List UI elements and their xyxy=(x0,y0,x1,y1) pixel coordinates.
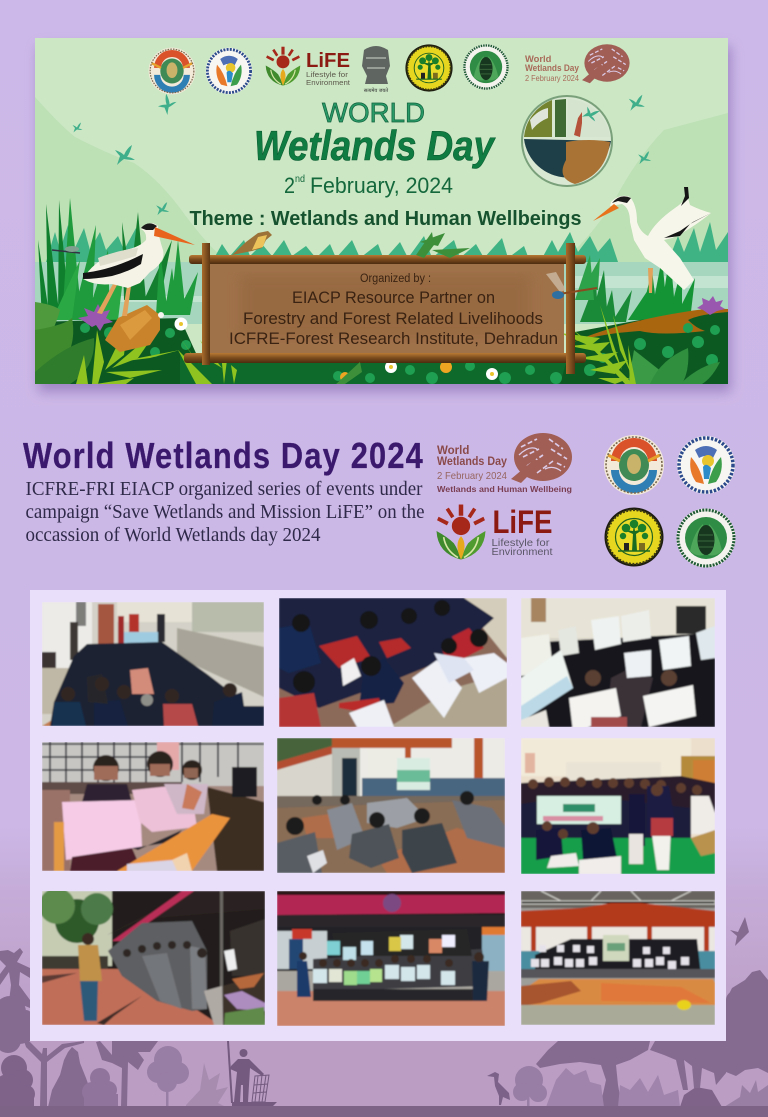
icon: wetlands globe xyxy=(522,96,612,186)
banner: marsh ground xyxy=(35,309,728,384)
logo: MoEFCC round xyxy=(604,435,664,495)
logo: World Wetlands Day 2024: 2 February 2024 xyxy=(437,470,507,482)
logo: LiFE Lifestyle for Environment: Lifestyle for xyxy=(492,537,550,549)
banner shadow xyxy=(38,46,731,392)
theme text: Theme : Wetlands and Human Wellbeings xyxy=(190,207,582,230)
signboard text xyxy=(229,273,558,348)
banner: frog xyxy=(105,305,164,352)
logo: World Wetlands Day: 2 February 2024 xyxy=(525,73,579,83)
banner: small flying birds xyxy=(72,92,651,215)
silhouette: left bush xyxy=(0,1055,35,1107)
photo: group portrait with banner xyxy=(521,738,715,874)
logo: EIACP round xyxy=(677,436,735,494)
icon: flowers xyxy=(78,296,725,382)
logo: LiFE Lifestyle for Environment: Environment xyxy=(492,546,553,558)
banner: back grass xyxy=(46,222,728,262)
logo: World Wetlands Day: Wetlands Day xyxy=(525,62,580,73)
silhouette: lacy bush xyxy=(82,1068,118,1107)
photo: boys addressed under canopy xyxy=(42,891,265,1025)
signboard xyxy=(184,243,586,374)
silhouette: palm tree xyxy=(96,1041,158,1107)
description text: occassion of World Wetlands day 2024 xyxy=(26,524,320,546)
silhouette: left palm xyxy=(0,948,34,1053)
description text: campaign “Save Wetlands and Mission LiFE” on the xyxy=(26,501,425,523)
bottom silhouette landscape xyxy=(0,917,768,1107)
heading: WORLD: WORLD xyxy=(322,97,425,128)
icon: national emblem: सत्यमेव जयते xyxy=(364,87,388,94)
signboard text: ICFRE-Forest Research Institute, Dehradun xyxy=(229,330,558,348)
logo: LiFE xyxy=(266,47,351,87)
signboard text: EIACP Resource Partner on xyxy=(292,289,495,307)
description text: ICFRE-FRI EIACP organized series of events under xyxy=(26,478,423,500)
silhouette: heron xyxy=(487,1072,510,1105)
icon: dragonfly xyxy=(546,272,597,299)
icon: small dragonfly xyxy=(52,246,80,253)
panel: photo gallery xyxy=(30,590,726,1041)
banner: front reeds left xyxy=(38,198,198,320)
silhouette: conifer xyxy=(48,1047,94,1107)
silhouette: ground band xyxy=(0,1106,768,1117)
date: February, 2024 xyxy=(310,173,453,198)
silhouette: right fern xyxy=(724,1080,768,1107)
logo: World Wetlands Day 2024: Wetlands and Human Wellbeing xyxy=(437,484,572,494)
banner: water xyxy=(35,262,728,324)
logo: World Wetlands Day: World xyxy=(525,53,552,64)
logo: World Wetlands Day xyxy=(525,44,630,83)
silhouette: fern xyxy=(186,1063,228,1107)
logo: World Wetlands Day 2024 xyxy=(437,433,572,494)
banner: palm fronds xyxy=(76,305,636,384)
photo: children seated on rooftop xyxy=(42,602,264,726)
logo: World Wetlands Day 2024: World xyxy=(437,445,469,457)
photo: scouts in grey seated outdoors xyxy=(277,738,505,873)
icon: leaves on frame xyxy=(335,232,470,385)
photo: group with posters under red banner xyxy=(277,891,505,1026)
banner logos row xyxy=(149,44,630,94)
date: nd xyxy=(295,174,305,185)
photo: students holding posters xyxy=(521,598,715,727)
silhouette: left bare tree xyxy=(24,1041,84,1107)
silhouette: right forest xyxy=(513,1041,726,1107)
photo: children drawing on floor xyxy=(279,598,507,727)
illustration: right stork xyxy=(593,187,711,293)
heading: Wetlands Day: Wetlands Day xyxy=(254,122,496,169)
logo: LiFE: Environment xyxy=(306,78,351,87)
date: 2 xyxy=(284,173,295,198)
logo: LiFE: Lifestyle for xyxy=(306,70,348,79)
signboard: bamboo frame xyxy=(184,243,586,374)
silhouette: round tree xyxy=(147,1046,189,1107)
section heading: World Wetlands Day 2024 xyxy=(23,435,424,476)
logo: LiFE Lifestyle for Environment: LiFE xyxy=(492,504,552,540)
icon: flying bird silhouette xyxy=(730,917,749,946)
logo: FRI round xyxy=(676,508,736,568)
photo: group in hall with rangoli xyxy=(521,891,715,1025)
logo: FRI xyxy=(463,44,509,90)
banner: large leaves xyxy=(35,302,720,384)
signboard text: Forestry and Forest Related Livelihoods xyxy=(243,310,543,328)
logo: LiFE Lifestyle for Environment xyxy=(437,504,553,560)
logo: MoEFCC xyxy=(149,48,195,94)
logo: LiFE: LiFE xyxy=(306,50,350,72)
logo: EIACP xyxy=(206,48,252,94)
illustration: left stork xyxy=(83,223,195,316)
icon: perched bird xyxy=(232,231,272,255)
logo: ICFRE xyxy=(405,44,453,92)
silhouette: right tree mass xyxy=(726,970,768,1076)
panel: top banner xyxy=(35,38,728,385)
icon: national emblem xyxy=(362,46,390,94)
icon: hummingbird xyxy=(582,106,600,122)
photo: three girls with posters at table xyxy=(42,742,264,871)
silhouette: man with spear and cage xyxy=(227,1041,277,1107)
logo: ICFRE round xyxy=(604,508,664,566)
logo: World Wetlands Day 2024: Wetlands Day xyxy=(437,456,508,468)
signboard: brown panel xyxy=(210,264,564,354)
signboard text: Organized by : xyxy=(360,273,431,285)
description text xyxy=(26,478,425,546)
banner: front reeds right xyxy=(575,252,695,322)
